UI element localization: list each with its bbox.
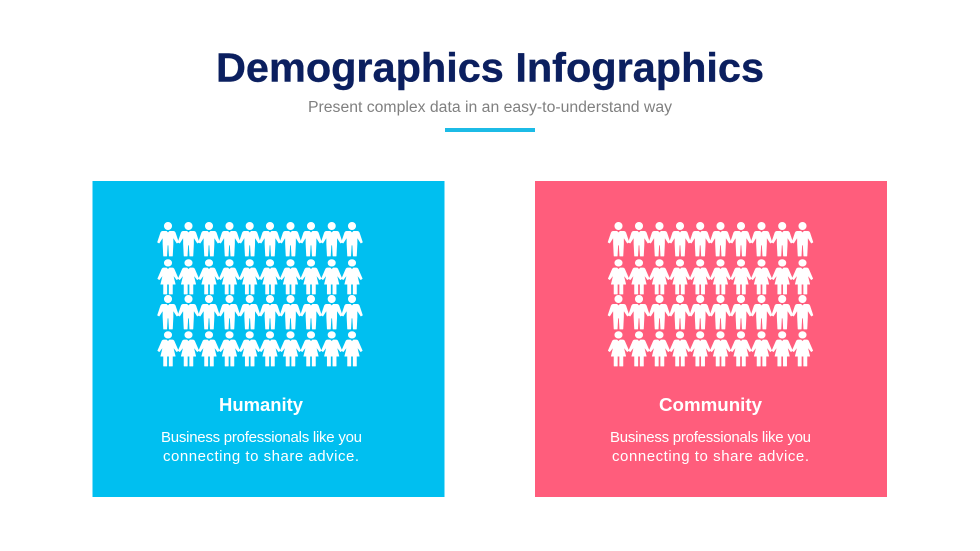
- accent underline: [445, 128, 535, 132]
- heading: Community: Community: [659, 395, 762, 415]
- body text: Humanity: Business professionals like you: [161, 429, 362, 446]
- icon grid: people rows: [158, 222, 362, 366]
- body text: Humanity: [161, 429, 362, 465]
- panel background: blue: [92, 181, 444, 497]
- panel background: pink: [535, 181, 887, 497]
- body text: Community: connecting to share advice.: [612, 448, 809, 465]
- body text: Community: [610, 429, 811, 465]
- panel: Humanity: [92, 181, 444, 497]
- heading: Humanity: Humanity: [219, 395, 303, 415]
- body text: Humanity: connecting to share advice.: [163, 448, 359, 465]
- subtitle: Present complex data in an easy-to-understand way: [308, 99, 672, 116]
- icon grid: people rows: [608, 222, 813, 366]
- body text: Community: Business professionals like you: [610, 429, 811, 446]
- panel: Community: [535, 181, 887, 497]
- title: Demographics Infographics: [216, 44, 764, 90]
